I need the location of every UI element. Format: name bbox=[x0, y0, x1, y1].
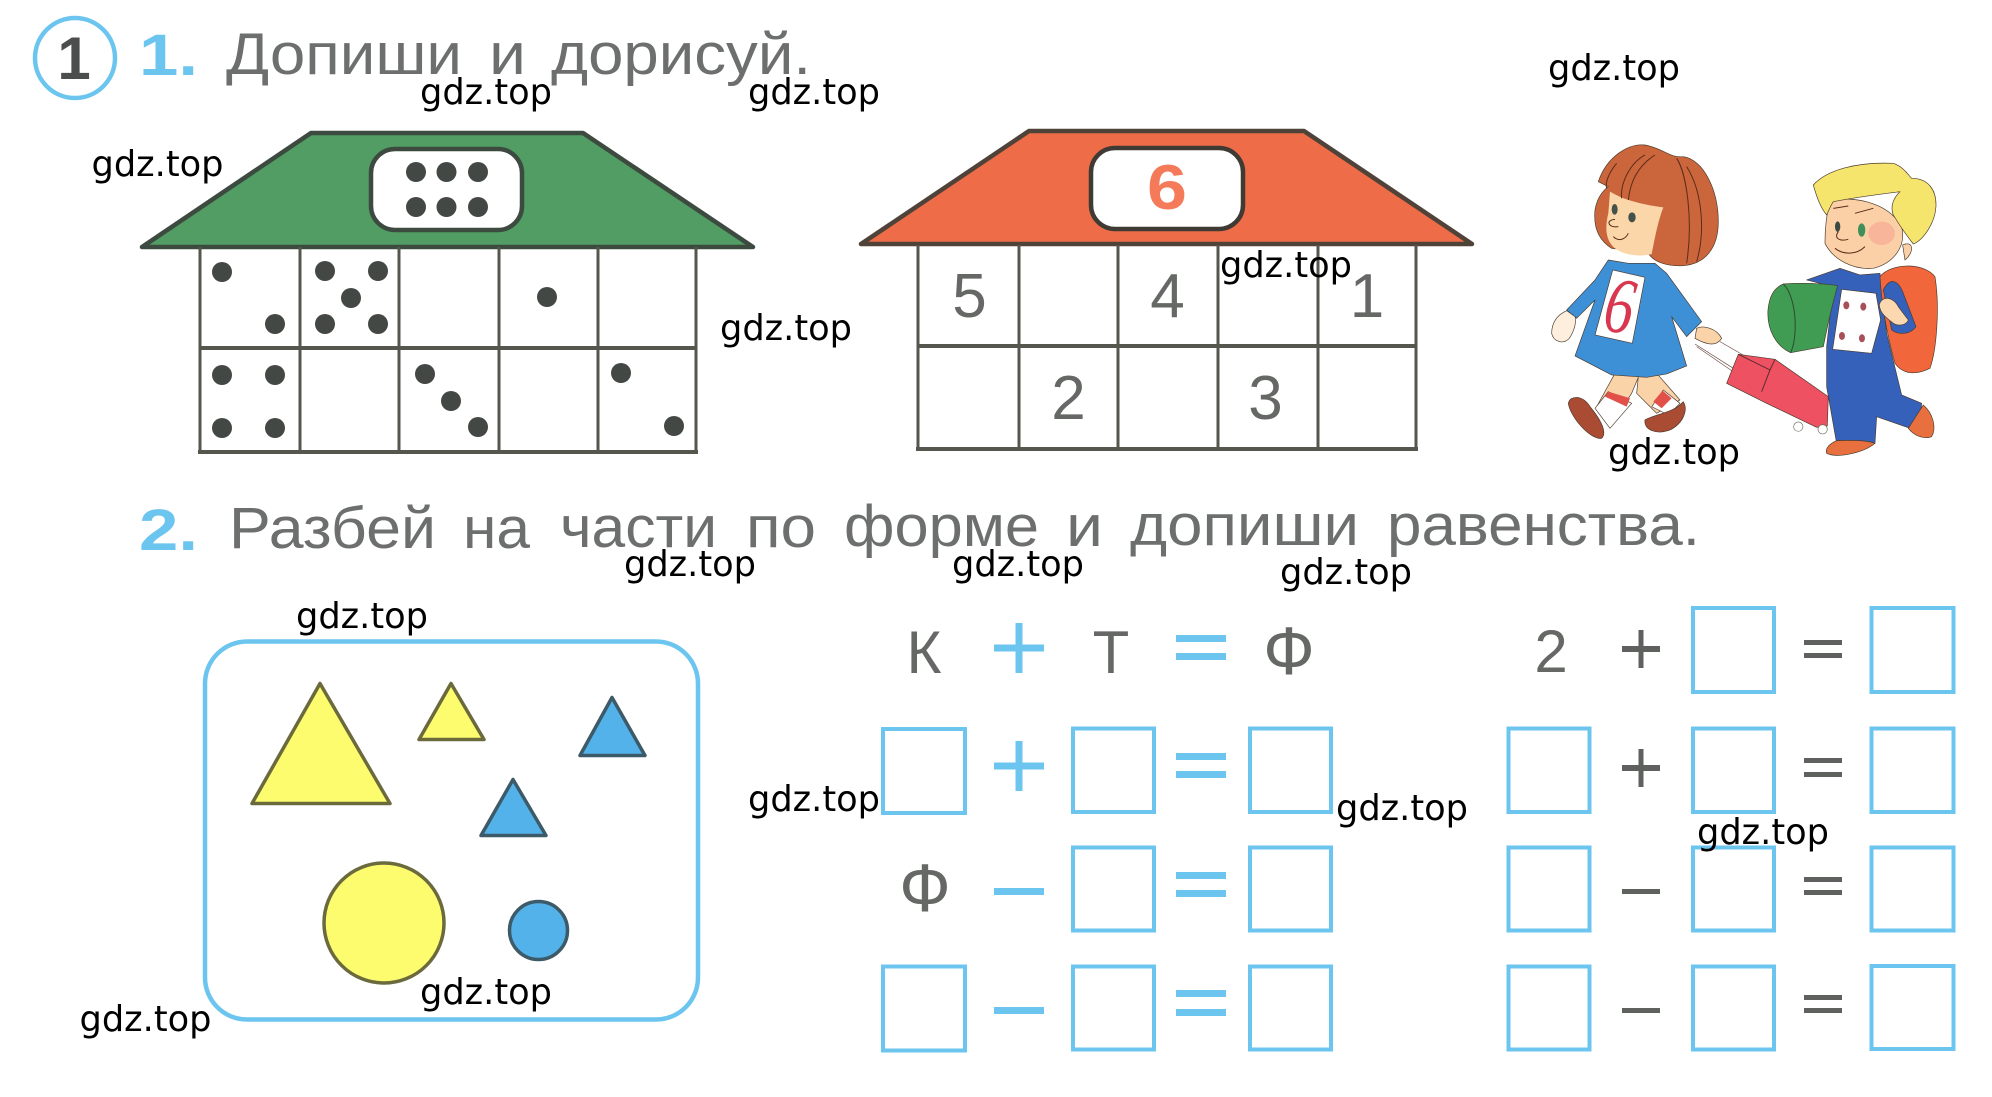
watermarks: gdz.top bbox=[1220, 245, 1352, 286]
green house with dots bbox=[142, 133, 753, 452]
boy bedroll bbox=[1768, 283, 1838, 353]
roof window with number 6: 6 bbox=[1147, 153, 1187, 223]
house numbers: 1 bbox=[1350, 262, 1384, 331]
boy number bib bbox=[1833, 289, 1881, 353]
girl legs and socks bbox=[1597, 373, 1640, 427]
orange house grid bbox=[916, 245, 1418, 449]
task 2 heading: 2. bbox=[139, 498, 198, 563]
orange house with numbers bbox=[861, 131, 1472, 449]
boy arm bbox=[1883, 281, 1916, 333]
watermarks bbox=[80, 48, 1829, 1040]
task 2 heading: на bbox=[463, 496, 531, 561]
row 3: letter minus boxes bbox=[899, 848, 1331, 930]
yellow circle bbox=[324, 863, 444, 983]
house numbers: 2 bbox=[1051, 364, 1086, 433]
girl hands bbox=[1552, 311, 1576, 342]
row 1: two plus box bbox=[1534, 608, 1954, 692]
illustration: two children with luggage bbox=[1552, 145, 1937, 455]
task 2 heading: части bbox=[560, 495, 717, 560]
boy hair bbox=[1813, 163, 1936, 244]
task 2 heading: форме bbox=[844, 494, 1039, 559]
watermarks: gdz.top bbox=[748, 72, 880, 113]
task 1 heading: Допиши bbox=[226, 22, 462, 87]
lesson number badge bbox=[35, 18, 115, 98]
task 1 heading: и bbox=[489, 22, 526, 87]
girl dress bbox=[1567, 260, 1702, 377]
yellow triangles bbox=[252, 684, 484, 804]
orange roof bbox=[861, 131, 1472, 244]
row 2: boxes addition bbox=[883, 728, 1331, 813]
task 1 heading bbox=[139, 22, 811, 88]
row 1: letters equation: К bbox=[907, 619, 942, 686]
shapes panel bbox=[205, 642, 698, 1020]
watermarks: gdz.top bbox=[748, 779, 880, 820]
task 1 heading: дорисуй. bbox=[551, 22, 811, 87]
lesson number badge: 1 bbox=[57, 25, 91, 92]
green roof bbox=[142, 133, 753, 247]
watermarks: gdz.top bbox=[1548, 48, 1680, 89]
watermarks: gdz.top bbox=[720, 308, 852, 349]
boy overalls bbox=[1807, 268, 1922, 443]
task 2 heading: и bbox=[1066, 494, 1103, 559]
watermarks: gdz.top bbox=[1336, 788, 1468, 829]
watermarks: gdz.top bbox=[1697, 812, 1829, 853]
roof window with number 6 bbox=[1091, 148, 1243, 229]
house numbers: 5 bbox=[952, 262, 987, 331]
boy hand bbox=[1879, 298, 1908, 325]
task 2 heading: допиши bbox=[1130, 493, 1359, 558]
rolling suitcase bbox=[1695, 342, 1828, 434]
green house grid bbox=[198, 247, 698, 452]
girl bbox=[1552, 145, 1722, 438]
blue triangles bbox=[481, 698, 645, 836]
watermarks: gdz.top bbox=[92, 144, 224, 185]
girl number bib bbox=[1595, 270, 1645, 343]
task 2 heading bbox=[139, 493, 1700, 563]
watermarks: gdz.top bbox=[420, 72, 552, 113]
roof window with six dots bbox=[371, 149, 522, 230]
equations with letters, left column bbox=[883, 613, 1331, 1050]
boy shoes bbox=[1908, 405, 1934, 438]
panel frame bbox=[205, 642, 698, 1020]
girl hair bbox=[1595, 145, 1718, 266]
boy bbox=[1768, 163, 1937, 455]
house numbers bbox=[952, 262, 1384, 433]
watermarks: gdz.top bbox=[624, 544, 756, 585]
girl shoes bbox=[1568, 397, 1604, 438]
row 3: boxes subtraction bbox=[1508, 848, 1954, 930]
house numbers: 4 bbox=[1150, 262, 1185, 331]
boy ear bbox=[1903, 244, 1912, 260]
girl face bbox=[1606, 192, 1663, 255]
watermarks: gdz.top bbox=[296, 596, 428, 637]
boy face bbox=[1825, 199, 1903, 268]
row 4: boxes subtraction bbox=[883, 966, 1331, 1050]
watermarks: gdz.top bbox=[1280, 552, 1412, 593]
row 1: letters equation bbox=[907, 613, 1315, 689]
task 2 heading: Разбей bbox=[229, 496, 436, 561]
row 1: letters equation: Т bbox=[1093, 619, 1129, 686]
row 3: letter minus boxes: Ф bbox=[899, 850, 951, 926]
row 2: boxes addition bbox=[1508, 728, 1954, 812]
boy backpack bbox=[1880, 266, 1937, 373]
row 1: two plus box: 2 bbox=[1534, 618, 1568, 685]
row 1: letters equation: Ф bbox=[1263, 613, 1315, 689]
task 2 heading: по bbox=[746, 495, 816, 560]
task 1 heading: 1. bbox=[139, 23, 198, 88]
girl: 6 bbox=[1598, 261, 1642, 353]
blue circle bbox=[510, 902, 568, 960]
domino dots bbox=[212, 261, 684, 438]
watermarks: gdz.top bbox=[1608, 432, 1740, 473]
task 2 heading: равенства. bbox=[1387, 493, 1700, 558]
watermarks: gdz.top bbox=[952, 544, 1084, 585]
equations with numbers, right column bbox=[1508, 608, 1954, 1050]
watermarks: gdz.top bbox=[420, 972, 552, 1013]
watermarks: gdz.top bbox=[80, 999, 212, 1040]
row 4: boxes subtraction bbox=[1508, 966, 1954, 1050]
house numbers: 3 bbox=[1248, 364, 1283, 433]
